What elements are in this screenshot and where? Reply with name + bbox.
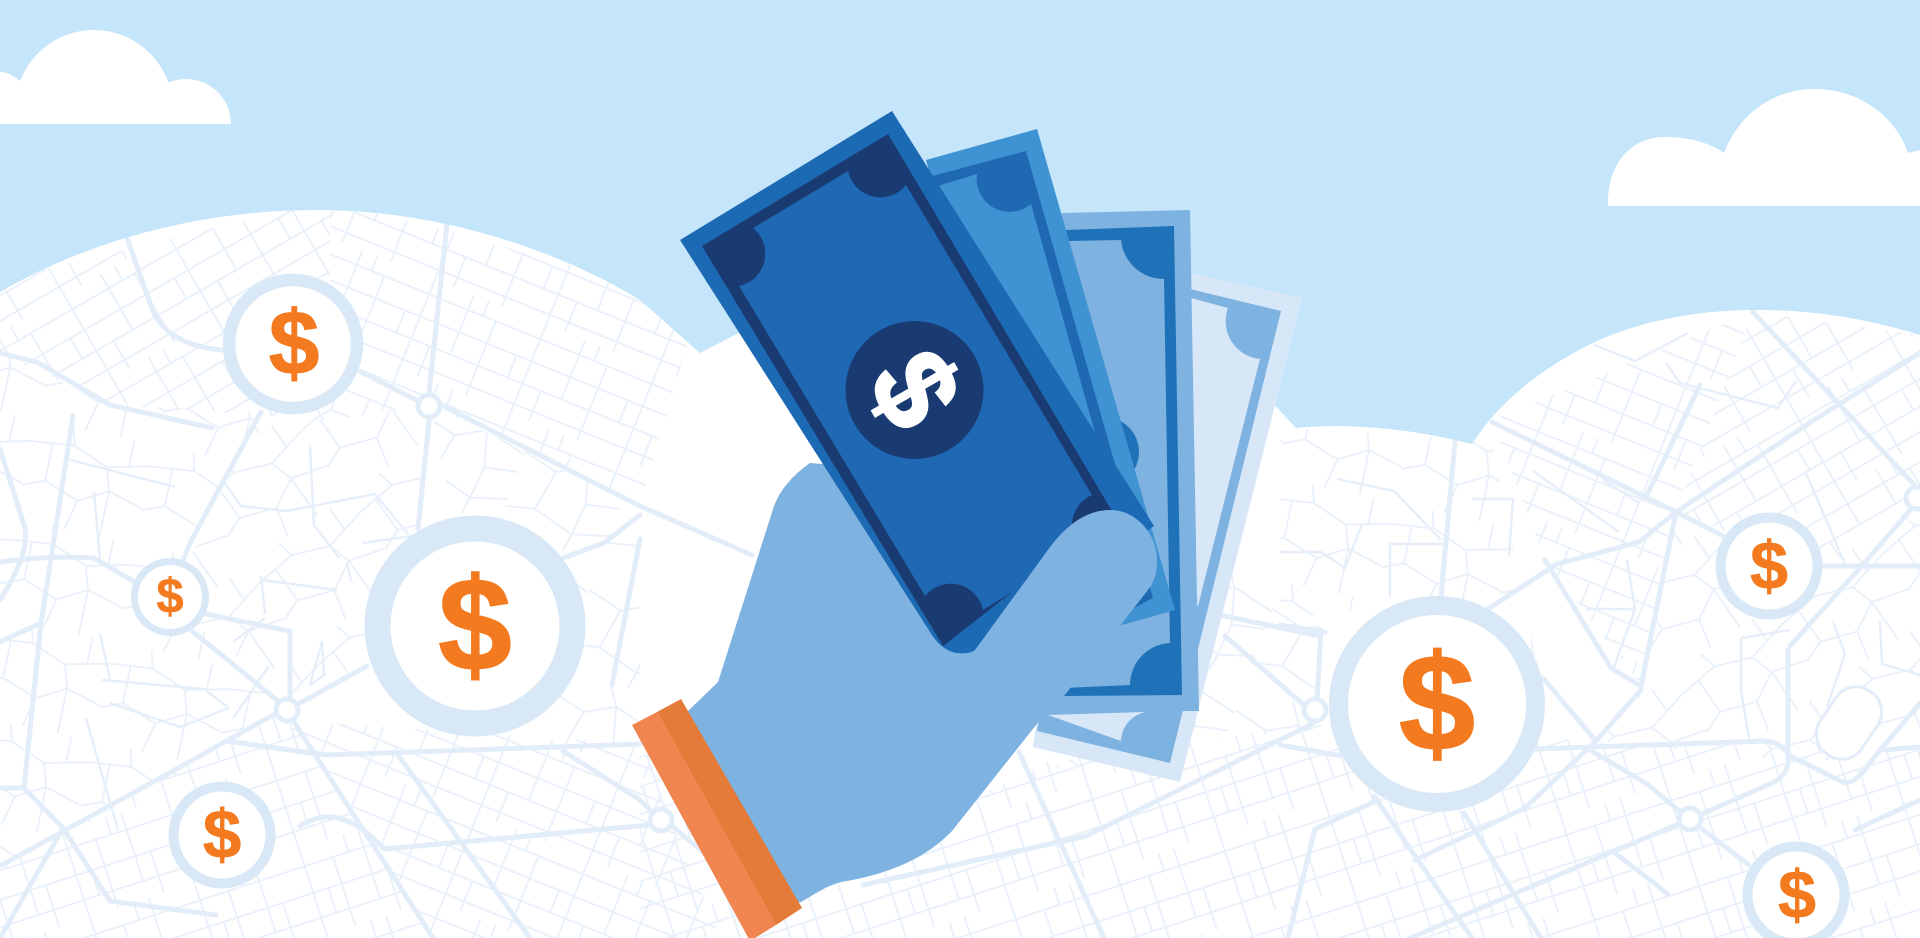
coin marker F (1720, 518, 1818, 614)
coin marker B: $ (156, 570, 184, 624)
hand palm (687, 463, 1120, 910)
cloud: top right (1608, 89, 1920, 206)
bill centre medallion (846, 321, 984, 459)
bill dollar sign: $ (843, 330, 986, 449)
secondary streets (67, 333, 1920, 830)
bill 1: front dark blue (680, 111, 1154, 653)
coin marker G (1748, 846, 1844, 938)
cloud: top left (0, 30, 231, 124)
bill 3: light blue (1044, 210, 1199, 712)
bill 4: palest, rear (1033, 255, 1302, 782)
bill 2: mid blue (925, 129, 1175, 627)
major roads (0, 224, 1920, 938)
minor streets (0, 200, 1920, 938)
coin marker C large (378, 528, 572, 724)
roundabouts (276, 395, 1920, 831)
coin marker C large: $ (438, 551, 512, 698)
track oval (1814, 685, 1884, 761)
coin marker D: $ (203, 796, 241, 873)
coin marker G: $ (1778, 857, 1816, 933)
shirt cuff (632, 699, 802, 938)
white hills with city map (0, 190, 1920, 938)
coin marker D (174, 786, 270, 884)
coin marker E large (1338, 606, 1536, 802)
coin marker A (229, 280, 357, 408)
thumb (960, 510, 1157, 720)
coin marker E large: $ (1399, 627, 1475, 780)
coin marker A: $ (269, 293, 319, 394)
coin marker B (134, 562, 206, 632)
coin marker F: $ (1750, 528, 1788, 604)
